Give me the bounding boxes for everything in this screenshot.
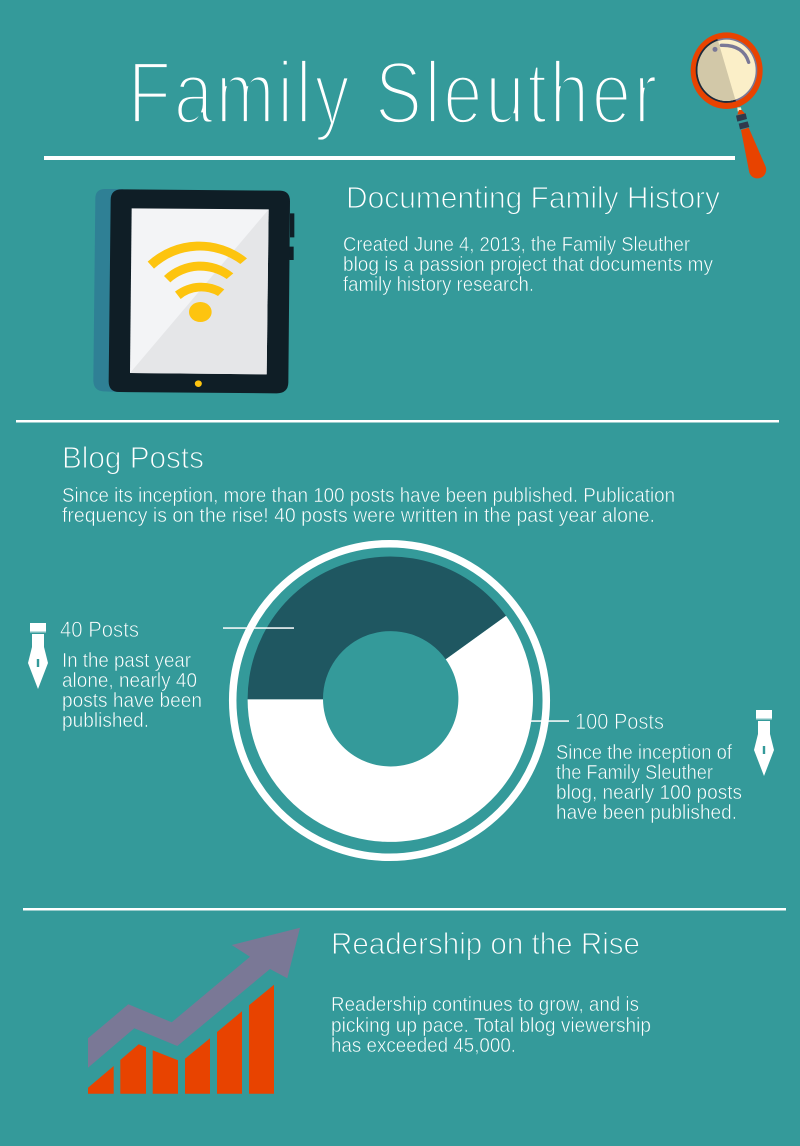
- icon: pen nib right: [754, 710, 774, 776]
- text block: readership description: has exceeded 45,000.: [331, 1035, 516, 1057]
- text block: documenting intro: Created June 4, 2013, the Family Sleuther: [343, 234, 690, 256]
- text block: documenting intro: blog is a passion project that documents my: [343, 254, 713, 276]
- icon: tablet with wifi: [93, 189, 294, 393]
- heading: blog posts: Blog Posts: [62, 440, 204, 475]
- text block: 40 posts description: alone, nearly 40: [62, 670, 197, 692]
- donut chart: [233, 544, 546, 857]
- text block: blog posts intro: frequency is on the rise! 40 posts were written in the past year alone.: [62, 505, 655, 527]
- text block: 40 posts description: published.: [62, 710, 149, 732]
- leader line: 40 posts: [223, 627, 294, 629]
- text block: 40 posts description: posts have been: [62, 690, 202, 712]
- text block: documenting intro: family history research.: [343, 274, 534, 296]
- text block: 100 posts description: blog, nearly 100 posts: [556, 782, 742, 804]
- leader line: 100 posts: [531, 720, 569, 722]
- text block: readership description: [331, 994, 651, 1057]
- text block: 40 posts description: [62, 650, 202, 732]
- text block: blog posts intro: Since its inception, more than 100 posts have been published. Publication: [62, 485, 675, 507]
- label: 40 posts: 40 Posts: [60, 617, 139, 642]
- text block: 100 posts description: [556, 742, 742, 824]
- title: Family Sleuther: [128, 43, 660, 142]
- heading: readership on the rise: Readership on the Rise: [331, 926, 640, 961]
- text block: 100 posts description: the Family Sleuther: [556, 762, 713, 784]
- heading: documenting family history: Documenting Family History: [346, 180, 720, 215]
- text block: 100 posts description: Since the inception of: [556, 742, 732, 764]
- text block: 100 posts description: have been published.: [556, 802, 737, 824]
- text block: blog posts intro: [62, 485, 675, 527]
- icon: pen nib left: [28, 623, 48, 689]
- text block: readership description: Readership continues to grow, and is: [331, 994, 639, 1016]
- icon: magnifying glass: [691, 32, 766, 178]
- text block: documenting intro: [343, 234, 713, 296]
- text block: 40 posts description: In the past year: [62, 650, 191, 672]
- label: 100 posts: 100 Posts: [575, 709, 664, 734]
- text block: readership description: picking up pace. Total blog viewership: [331, 1015, 651, 1037]
- icon: growth chart with arrow: [88, 928, 300, 1094]
- title rule: [44, 156, 735, 160]
